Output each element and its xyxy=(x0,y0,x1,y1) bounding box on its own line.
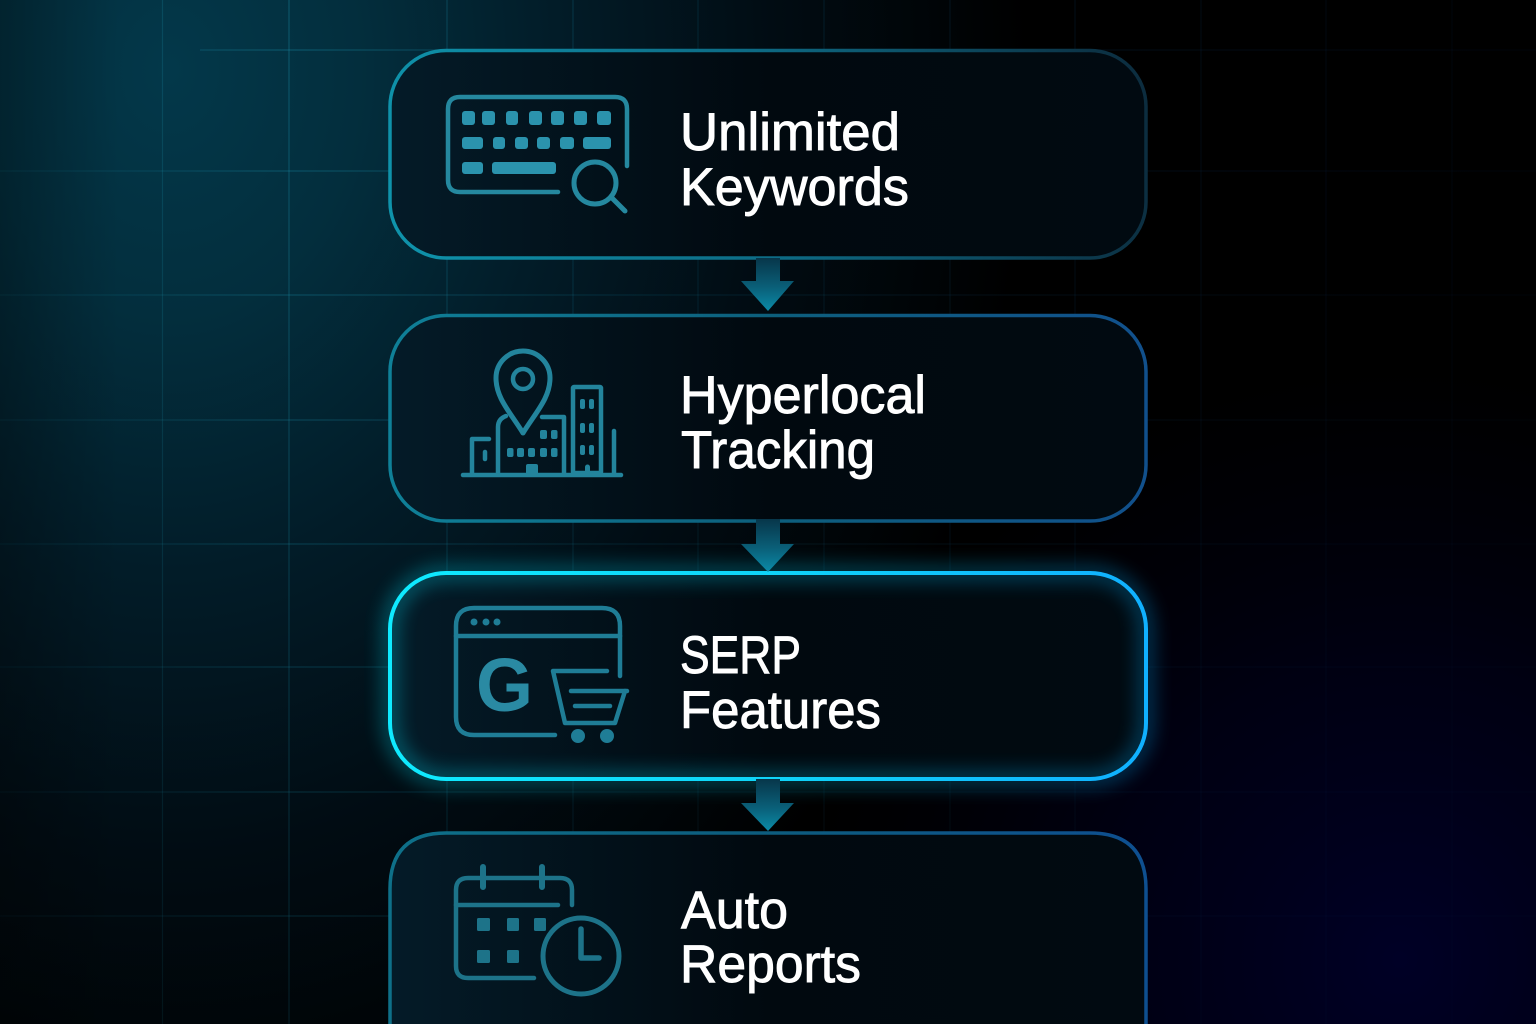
panel: hyperlocal tracking xyxy=(390,316,1146,521)
heading: Unlimited Keywords xyxy=(680,103,909,217)
heading: SERP Features: SERP xyxy=(680,626,801,685)
icon: keyboard with magnifier xyxy=(448,97,627,211)
icon: calendar with clock xyxy=(456,867,619,994)
icon: browser with cart xyxy=(456,608,627,743)
heading: Hyperlocal Tracking: Tracking xyxy=(681,421,875,480)
heading: Auto Reports: Reports xyxy=(680,935,861,994)
arrow: SERP to reports xyxy=(741,779,794,831)
heading: Auto Reports xyxy=(680,881,861,994)
panel: auto reports xyxy=(390,833,1146,1024)
heading: Hyperlocal Tracking xyxy=(680,366,926,480)
panel: unlimited keywords xyxy=(390,50,1146,258)
heading: Hyperlocal Tracking: Hyperlocal xyxy=(680,366,926,425)
heading: SERP Features: Features xyxy=(680,681,881,740)
arrow: keywords to tracking xyxy=(741,258,794,311)
heading: Unlimited Keywords: Keywords xyxy=(680,158,909,217)
heading: SERP Features xyxy=(680,626,881,740)
heading: Unlimited Keywords: Unlimited xyxy=(680,103,900,162)
panel: SERP features (highlighted) xyxy=(390,573,1146,779)
icon: map pin and city xyxy=(463,351,621,475)
icon letter: G: G xyxy=(476,643,533,727)
heading: Auto Reports: Auto xyxy=(681,881,788,940)
arrow: tracking to SERP xyxy=(741,519,794,572)
